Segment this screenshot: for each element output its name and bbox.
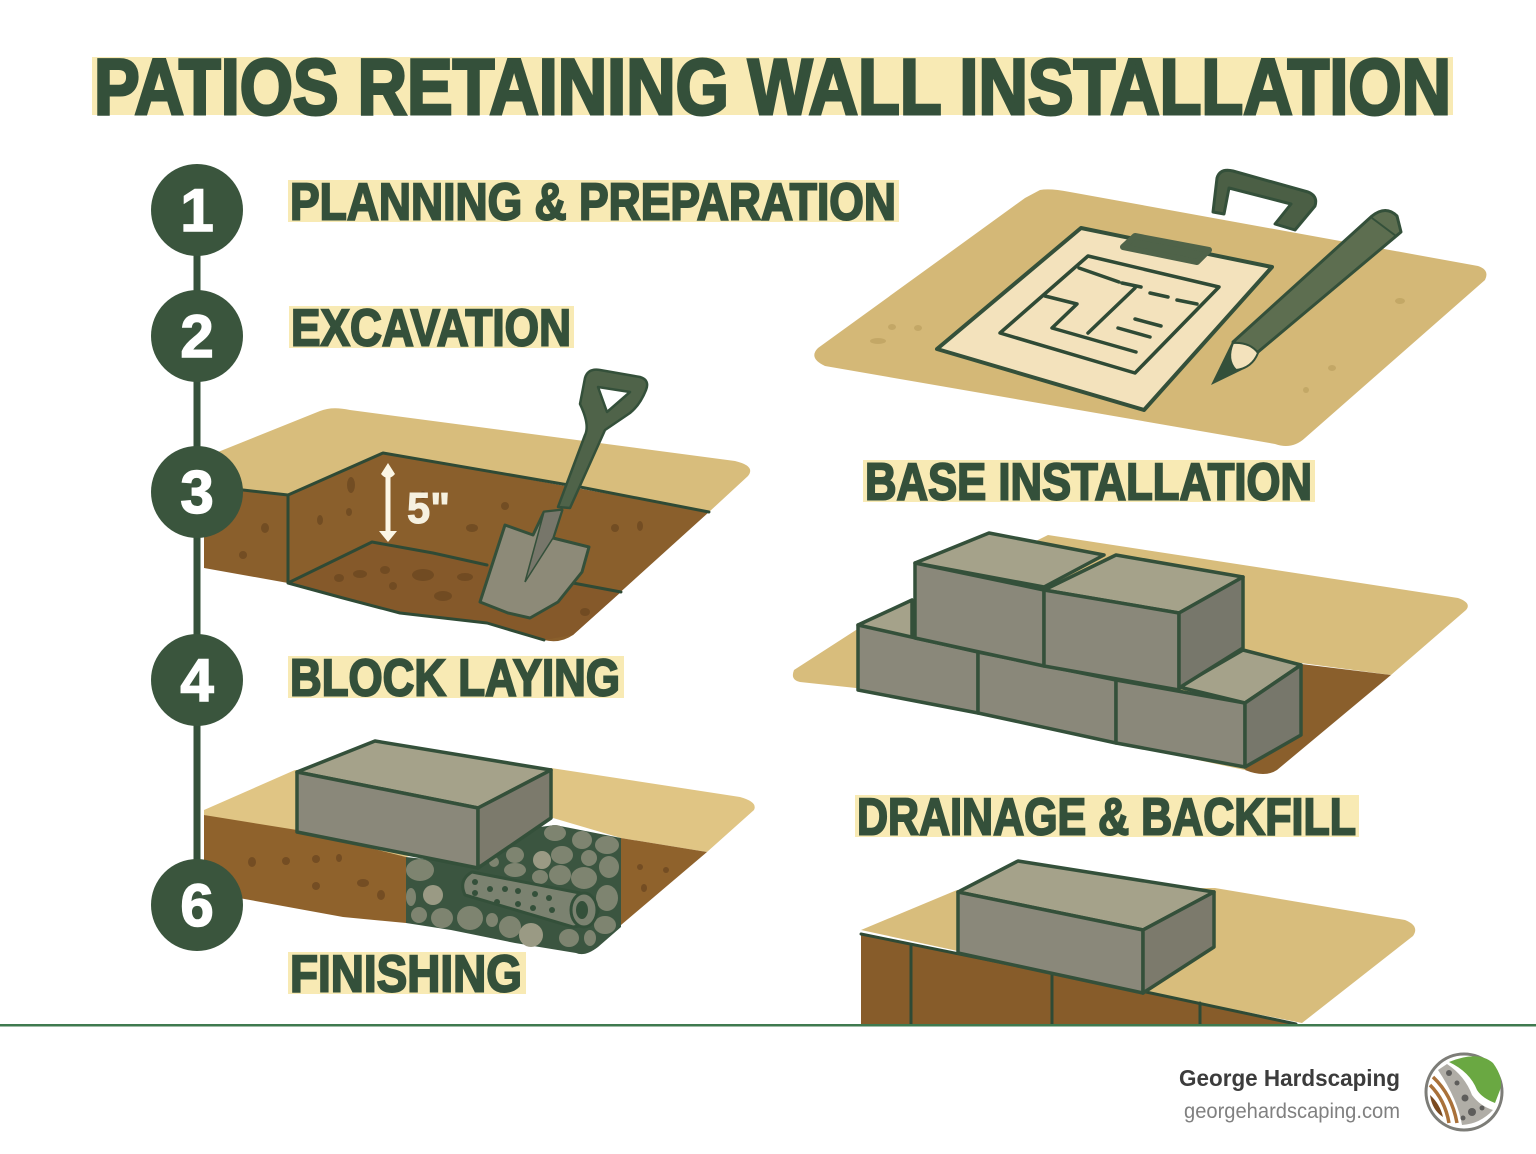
heading: drainage and backfill: DRAINAGE & BACKFILL [857, 788, 1356, 846]
soil left [204, 815, 406, 923]
heading: finishing: FINISHING [290, 946, 522, 1004]
depth arrow [386, 472, 390, 532]
logo soil arcs [1430, 1077, 1457, 1123]
step 1 marker: 1 [180, 177, 214, 244]
floor plan lines [1000, 256, 1219, 373]
step 3 marker: 3 [180, 459, 214, 526]
soil body [204, 453, 709, 641]
pit outlines [204, 453, 709, 640]
company logo [1426, 1054, 1502, 1130]
step 6 marker [151, 859, 243, 951]
illustration: block laying on base [793, 533, 1468, 774]
pit floor [288, 542, 621, 640]
soil speckles [248, 854, 669, 900]
step 6 marker: 6 [180, 872, 214, 939]
step 2 marker [151, 290, 243, 382]
footer brand name: George Hardscaping [1179, 1065, 1400, 1091]
clipboard handle [1213, 170, 1316, 230]
shovel [480, 370, 647, 618]
step 4 marker [151, 634, 243, 726]
sand ground [793, 535, 1468, 770]
step 4 marker: 4 [180, 647, 214, 714]
heading: planning and preparation: PLANNING & PREPARATION [290, 174, 896, 232]
upper block row [915, 533, 1243, 690]
soil corner [1245, 664, 1391, 774]
logo stones [1438, 1064, 1493, 1125]
footer website: georgehardscaping.com [1184, 1099, 1400, 1123]
illustration: drainage pipe and gravel [204, 741, 755, 954]
sand ground [861, 888, 1415, 1023]
soil right [621, 838, 707, 925]
lower block row [858, 600, 1301, 767]
gravel [406, 825, 621, 954]
pencil [1211, 210, 1401, 385]
logo leaf [1449, 1056, 1501, 1103]
step 1 marker [151, 164, 243, 256]
perforated pipe [463, 872, 598, 927]
soil courses [861, 934, 1296, 1024]
timeline connector line [194, 240, 200, 880]
heading: base installation: BASE INSTALLATION [865, 454, 1312, 512]
sand ground [204, 408, 750, 512]
sand ground [814, 189, 1486, 446]
step 2 marker: 2 [180, 303, 214, 370]
heading: block laying: BLOCK LAYING [290, 650, 620, 708]
depth label: 5" [407, 484, 450, 533]
heading: excavation: EXCAVATION [291, 300, 571, 358]
illustration: clipboard plan on sand [814, 170, 1486, 446]
concrete block [958, 861, 1214, 993]
sand ground [204, 768, 755, 857]
plan sheet [937, 228, 1272, 410]
illustration: excavation with shovel [204, 370, 750, 641]
concrete block [297, 741, 551, 868]
illustration: finished wall with backfill [861, 861, 1415, 1024]
step 3 marker [151, 446, 243, 538]
clip [1123, 236, 1209, 262]
footer band [0, 1024, 1536, 1154]
